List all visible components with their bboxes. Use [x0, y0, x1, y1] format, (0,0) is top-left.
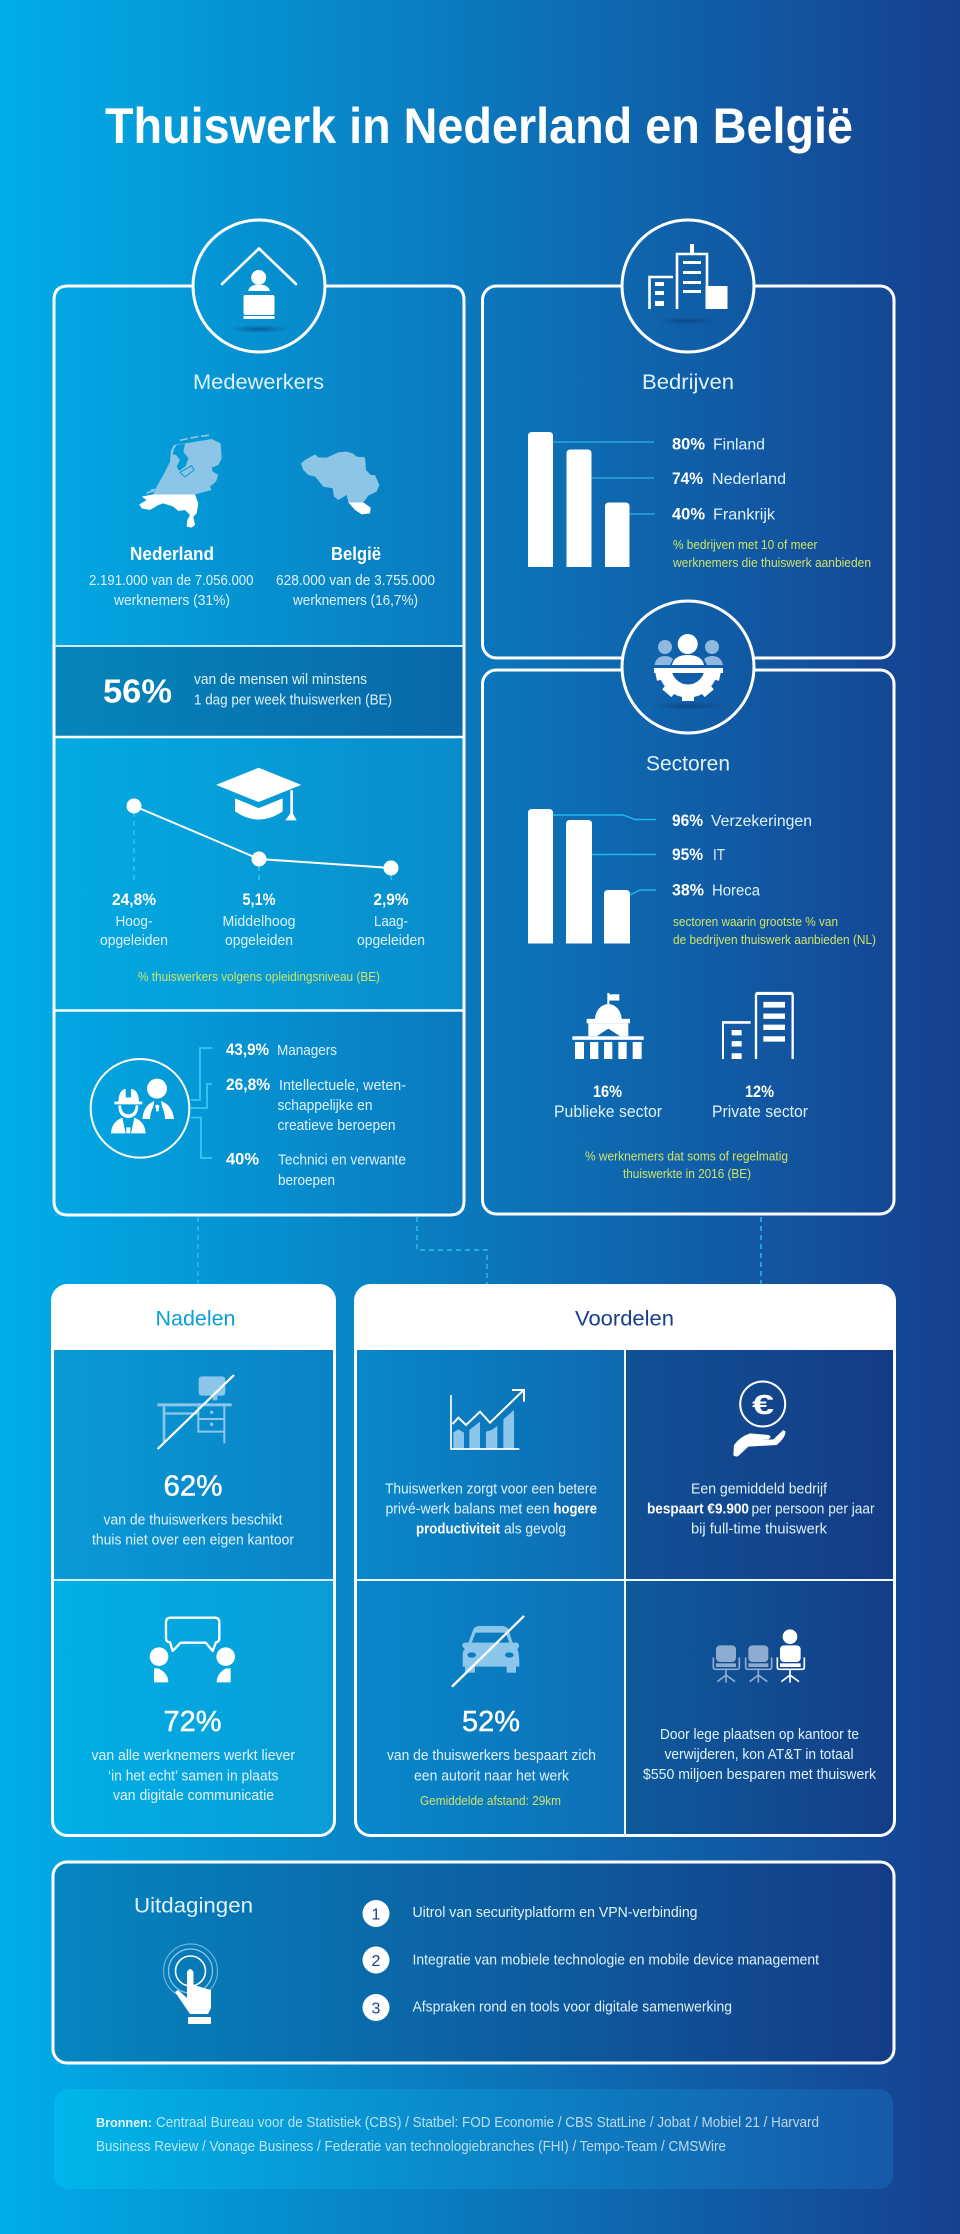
stat: belgie: werknemers (16,7%): [292, 593, 418, 609]
stat: belgie: [276, 544, 435, 609]
caption: bedrijven: werknemers die thuiswerk aanbieden: [672, 556, 871, 570]
caption: education: % thuiswerkers volgens opleidingsniveau (BE): [138, 970, 380, 984]
bar chart: bedrijven: [528, 432, 655, 567]
stat: verzekeringen: [672, 812, 812, 830]
stat: nederland: 74%: [672, 470, 703, 488]
text: productiviteit: privé-werk balans met een: [386, 1502, 550, 1518]
caption: sector employees: [585, 1150, 788, 1181]
text: AT&T besparing: $550 miljoen besparen met thuiswerk: [643, 1767, 877, 1783]
icon: growth chart: [451, 1390, 524, 1449]
text: autorit: van de thuiswerkers bespaart zich: [387, 1748, 596, 1764]
sources text: Business Review / Vonage Business / Federatie van technologiebranches (FHI) / Tempo-Team / CMSWire: [96, 2139, 726, 2155]
stat: managers: [226, 1041, 337, 1059]
item 1: [362, 1900, 698, 1927]
icon: graduation cap: [216, 768, 301, 820]
caption: sectoren: [673, 915, 876, 947]
stat: intellectuele beroepen: [226, 1076, 406, 1134]
icon: no car: [453, 1617, 523, 1686]
stat: horeca: 38%: [672, 882, 704, 900]
line chart: education: [126, 798, 398, 881]
text: in het echt: [92, 1748, 295, 1804]
heading: uitdagingen: Uitdagingen: [134, 1894, 253, 1918]
stat: finland: 80%: [672, 436, 705, 454]
caption: sectoren: de bedrijven thuiswerk aanbieden (NL): [673, 933, 876, 947]
text: besparing 9900: Een gemiddeld bedrijf: [691, 1482, 828, 1498]
card outline: [356, 1286, 894, 1836]
text: wish to work from home: van de mensen wil minstens: [194, 672, 367, 688]
stat: technici: [226, 1150, 406, 1189]
icon: private building: [723, 993, 793, 1059]
stat: publieke sector: 16%: [593, 1083, 622, 1101]
stat: IT: [672, 846, 725, 864]
panel backgrounds: [355, 1285, 895, 1836]
icon: office chairs: [713, 1629, 804, 1683]
text: productiviteit: als gevolg: [504, 1522, 566, 1538]
label: laagopgeleiden: 2,9%: [374, 891, 409, 909]
label: middelhoog: opgeleiden: [225, 933, 293, 949]
icon: euro in hand: €: [752, 1389, 775, 1420]
text: geen kantoor: [92, 1512, 294, 1548]
stat: publieke sector: Publieke sector: [554, 1103, 662, 1121]
text: wish to work from home: [194, 672, 392, 708]
icon: conversation: [150, 1618, 235, 1682]
text: wish to work from home: 1 dag per week thuiswerken (BE): [194, 692, 392, 708]
panel background: [54, 2089, 893, 2189]
text: AT&T besparing: verwijderen, kon AT&T in totaal: [664, 1747, 854, 1763]
heading: medewerkers: Medewerkers: [193, 371, 324, 394]
bar chart: sectoren: [528, 809, 656, 944]
icon: public building: [572, 993, 644, 1059]
label: hoogopgeleiden: 24,8%: [112, 891, 156, 909]
divider lines: [54, 645, 464, 647]
connectors: occupation: [191, 1048, 212, 1158]
icon: no desk: [157, 1376, 233, 1448]
text: autorit: [387, 1748, 596, 1808]
stat: nederland: Nederland: [130, 544, 214, 564]
stat: intellectuele beroepen: schappelijke en: [278, 1098, 372, 1114]
text: besparing 9900: bespaart €9.900: [647, 1502, 749, 1518]
text: AT&T besparing: Door lege plaatsen op kantoor te: [660, 1727, 859, 1743]
stat: technici: Technici en verwante: [278, 1152, 406, 1168]
divider: [52, 1579, 335, 1581]
item 3: Afspraken rond en tools voor digitale samenwerking: [412, 2000, 732, 2016]
caption: sector employees: % werknemers dat soms of regelmatig: [585, 1150, 788, 1164]
sources text: Bronnen:: [96, 2115, 152, 2130]
stat: private sector: [712, 1083, 808, 1121]
title: Thuiswerk in Nederland en België: [105, 98, 853, 154]
band: 56 percent: [54, 646, 464, 737]
label: middelhoog: [222, 891, 296, 949]
text: productiviteit: productiviteit: [416, 1522, 500, 1538]
dividers: [355, 1350, 895, 1836]
stat: technici: 40%: [226, 1150, 259, 1168]
card outline: [52, 1286, 334, 1836]
caption: sector employees: thuiswerkte in 2016 (BE): [623, 1167, 751, 1181]
text: productiviteit: Thuiswerken zorgt voor een betere: [385, 1482, 597, 1498]
stat: nederland: [89, 544, 254, 609]
text: besparing 9900: [647, 1482, 875, 1538]
item 3: [362, 1994, 732, 2021]
icon: home worker: [193, 220, 325, 352]
panel: nadelen: [52, 1285, 335, 1836]
label: hoogopgeleiden: opgeleiden: [100, 933, 168, 949]
heading: sectoren: Sectoren: [646, 752, 730, 776]
statistic: 56 percent text: 56%: [103, 672, 172, 710]
icon: workers: [91, 1059, 189, 1158]
stat: managers: 43,9%: [226, 1041, 269, 1059]
card outline: [482, 286, 894, 658]
item 2: 2: [372, 1953, 380, 1970]
panel backgrounds: [52, 1285, 335, 1836]
stat: finland: [672, 436, 765, 454]
stat: finland: Finland: [713, 436, 765, 454]
sources text: Centraal Bureau voor de Statistiek (CBS) / Statbel: FOD Economie / CBS StatLine / Jobat / Mobiel 21 / Harvard: [156, 2115, 819, 2131]
label: middelhoog: 5,1%: [242, 891, 276, 909]
caption: bedrijven: [672, 538, 871, 570]
text: besparing 9900: bij full-time thuiswerk: [691, 1522, 828, 1538]
stat: horeca: Horeca: [712, 882, 760, 900]
heading: voordelen: Voordelen: [575, 1308, 674, 1330]
item 2: Integratie van mobiele technologie en mobile device management: [412, 1952, 819, 1968]
panel: bedrijven: [482, 220, 894, 658]
label: laagopgeleiden: Laag-: [374, 914, 408, 930]
stat: 62 percent: 62%: [164, 1470, 222, 1502]
stat: IT: IT: [713, 847, 725, 864]
stat: frankrijk: Frankrijk: [713, 506, 775, 524]
caption: sectoren: sectoren waarin grootste % van: [673, 915, 838, 929]
text: autorit: een autorit naar het werk: [414, 1768, 570, 1784]
stat: managers: Managers: [277, 1043, 337, 1059]
item 1: Uitrol van securityplatform en VPN-verbinding: [412, 1905, 698, 1921]
text: in het echt: van digitale communicatie: [113, 1788, 274, 1804]
text: in het echt: van alle werknemers werkt liever: [92, 1748, 295, 1764]
text: in het echt: ‘in het echt’ samen in plaats: [108, 1768, 278, 1784]
text: productiviteit: hogere: [554, 1502, 597, 1518]
heading: bedrijven: Bedrijven: [642, 371, 734, 394]
label: hoogopgeleiden: Hoog-: [116, 914, 153, 930]
text: autorit: Gemiddelde afstand: 29km: [420, 1794, 561, 1808]
label: laagopgeleiden: opgeleiden: [357, 933, 425, 949]
card outline: [482, 670, 894, 1214]
icon: office buildings: [622, 220, 754, 352]
stat: nederland: [672, 470, 786, 488]
text: AT&T besparing: [643, 1727, 877, 1783]
stat: 72 percent: 72%: [164, 1706, 222, 1738]
stat: verzekeringen: Verzekeringen: [711, 813, 812, 830]
stat: intellectuele beroepen: 26,8%: [226, 1076, 270, 1094]
stat: private sector: Private sector: [712, 1103, 808, 1121]
heading: nadelen: Nadelen: [156, 1308, 236, 1330]
label: laagopgeleiden: [357, 891, 425, 949]
stat: horeca: [672, 882, 760, 900]
icon: team and gear: [622, 601, 754, 733]
item 3: 3: [372, 2000, 380, 2018]
stat: nederland: werknemers (31%): [113, 593, 230, 609]
panel: education background: [54, 737, 464, 1011]
panel: occupation background: [54, 1011, 464, 1215]
item 1: 1: [372, 1906, 380, 1924]
card outline: [54, 286, 464, 1215]
stat: IT: 95%: [672, 846, 703, 864]
card background: [53, 1862, 894, 2063]
panel: voordelen: [355, 1285, 895, 1836]
stat: belgie: 628.000 van de 3.755.000: [276, 573, 435, 589]
item 2: [362, 1946, 819, 1974]
map: belgie: [301, 452, 379, 514]
stat: nederland: 2.191.000 van de 7.056.000: [89, 573, 254, 589]
icon: euro in hand: [733, 1382, 786, 1456]
panel: uitdagingen: [53, 1862, 894, 2063]
stat: intellectuele beroepen: creatieve beroepen: [278, 1118, 396, 1134]
stat: 52 percent: 52%: [462, 1706, 520, 1738]
text: besparing 9900: per persoon per jaar: [752, 1502, 875, 1518]
panel: sectoren: [482, 601, 894, 1214]
caption: bedrijven: % bedrijven met 10 of meer: [673, 538, 818, 552]
stat: private sector: 12%: [745, 1083, 774, 1101]
stat: verzekeringen: 96%: [672, 812, 703, 830]
sources text: [96, 2115, 819, 2155]
stat: publieke sector: [554, 1083, 662, 1121]
label: hoogopgeleiden: [100, 891, 168, 949]
text: productiviteit: [385, 1482, 597, 1538]
text: geen kantoor: van de thuiswerkers beschikt: [104, 1512, 282, 1528]
panel: bronnen: [54, 2089, 893, 2189]
stat: nederland: Nederland: [712, 471, 786, 488]
stat: frankrijk: [672, 506, 775, 524]
map: nederland: [139, 435, 222, 528]
stat: belgie: België: [331, 544, 381, 564]
text: geen kantoor: thuis niet over een eigen kantoor: [92, 1532, 294, 1548]
icon: touch: [164, 1944, 218, 2024]
label: middelhoog: Middelhoog: [222, 914, 296, 930]
panel: medewerkers: [54, 220, 464, 1215]
stat: technici: beroepen: [278, 1173, 335, 1189]
stat: frankrijk: 40%: [672, 506, 705, 524]
stat: intellectuele beroepen: Intellectuele, weten-: [279, 1078, 406, 1094]
connectors: dashed: [198, 1217, 761, 1284]
